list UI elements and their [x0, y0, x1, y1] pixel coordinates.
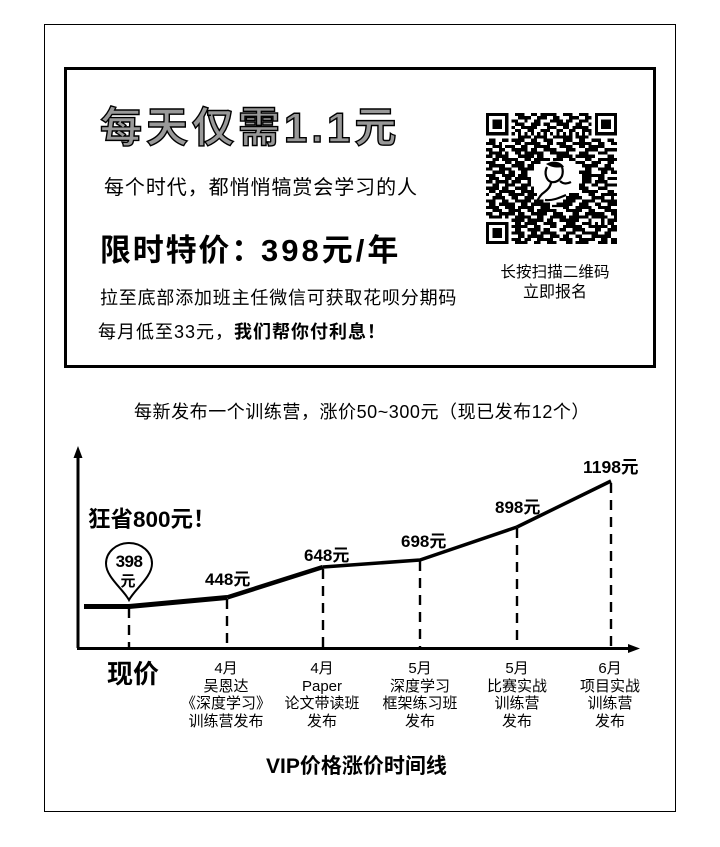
milestone: project: 发布	[595, 713, 625, 730]
label: 648: 648元	[304, 546, 349, 565]
heading: price rule: 每新发布一个训练营，涨价50~300元（现已发布12个）	[134, 402, 590, 422]
milestone: Wu Enda: 训练营发布	[188, 713, 264, 730]
text: pin price: 398	[116, 552, 142, 571]
milestone: competition: 训练营	[494, 695, 540, 712]
milestone: Paper: 发布	[307, 713, 337, 730]
milestone: competition: 比赛实战	[487, 678, 547, 695]
chart title: VIP价格涨价时间线	[266, 755, 447, 778]
heading: limited price: 限时特价：398元/年	[100, 233, 401, 268]
text: QR caption: 长按扫描二维码	[500, 264, 610, 281]
milestone: competition: 发布	[502, 713, 532, 730]
milestone: project: 项目实战	[580, 678, 640, 695]
callout: saving: 狂省800元！	[88, 507, 216, 532]
milestone: Paper	[284, 660, 360, 730]
label: 898: 898元	[495, 498, 540, 517]
milestone: Wu Enda: 《深度学习》	[181, 695, 271, 712]
label: 1198: 1198元	[583, 457, 638, 477]
price line	[84, 481, 611, 606]
milestone: framework: 发布	[405, 713, 435, 730]
milestone: Wu Enda	[181, 660, 271, 730]
milestone: Wu Enda: 吴恩达	[203, 678, 248, 695]
milestone: Wu Enda: 4月	[214, 660, 238, 677]
milestone: framework: 深度学习	[390, 678, 450, 695]
label: 698: 698元	[401, 532, 446, 551]
y axis	[74, 446, 82, 648]
text: monthly price: 每月低至33元，我们帮你付利息！	[98, 322, 386, 342]
label: current price: 现价	[107, 659, 159, 689]
milestone: competition	[487, 660, 547, 730]
icon: price pin	[106, 543, 152, 600]
milestone: project	[580, 660, 640, 730]
text: QR caption second line: 立即报名	[523, 284, 587, 301]
panel: offer	[64, 67, 656, 368]
heading: price per day: 每天仅需1.1元	[100, 104, 400, 151]
milestone: framework: 5月	[408, 660, 432, 677]
milestone: framework: 框架练习班	[382, 695, 458, 712]
milestone: Paper: 4月	[310, 660, 334, 677]
label: 448: 448元	[205, 570, 250, 589]
milestone: competition: 5月	[505, 660, 529, 677]
milestone: framework	[382, 660, 458, 730]
milestone: project: 训练营	[587, 695, 632, 712]
x axis	[77, 644, 640, 653]
milestone: project: 6月	[598, 660, 622, 677]
milestone: Paper: Paper	[302, 678, 342, 695]
text: pin unit: 元	[120, 573, 136, 590]
milestone: Paper: 论文带读班	[284, 695, 360, 712]
text: instalment note: 拉至底部添加班主任微信可获取花呗分期码	[100, 288, 457, 308]
dashed guides	[129, 483, 611, 648]
text: tagline: 每个时代，都悄悄犒赏会学习的人	[104, 177, 418, 199]
